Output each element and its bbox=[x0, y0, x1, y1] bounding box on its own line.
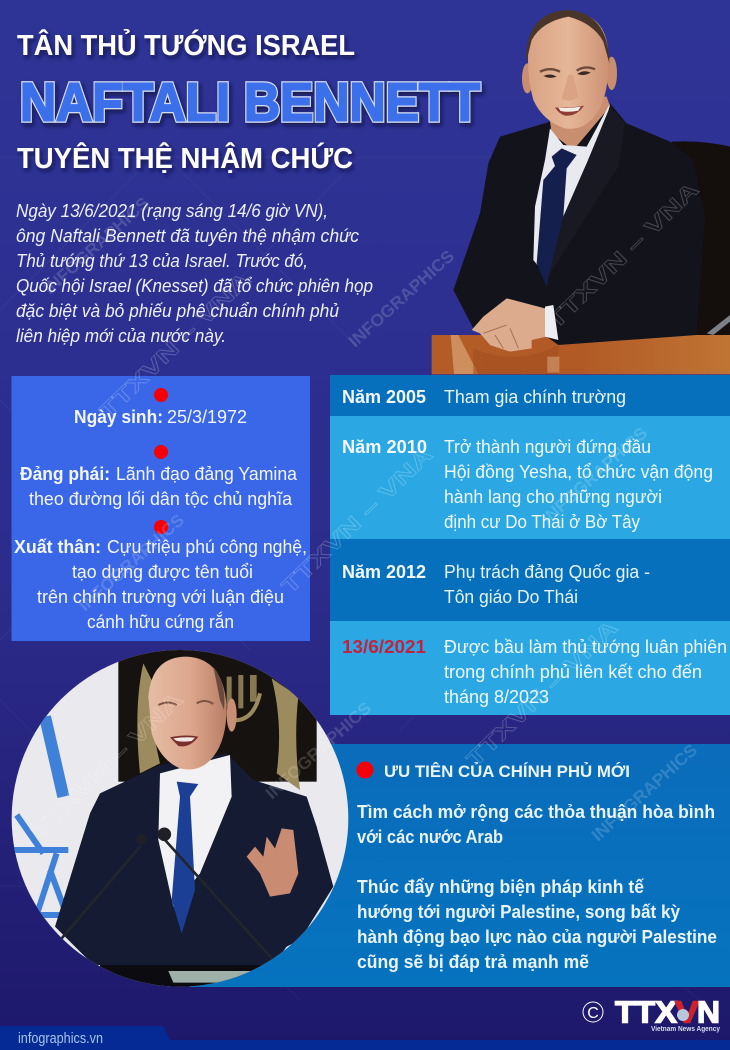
tie bbox=[537, 148, 577, 287]
text: date of birth: 25/3/1972 bbox=[167, 407, 247, 427]
flag bbox=[13, 717, 68, 915]
text: first priority bbox=[357, 802, 715, 847]
head bbox=[528, 12, 609, 129]
row: 13/6/2021: 13/6/2021 bbox=[342, 637, 426, 657]
text: first priority: Tìm cách mở rộng các thỏa thuận hòa bình bbox=[357, 802, 715, 822]
watermark: infographics: INFOGRAPHICS bbox=[75, 511, 188, 615]
intro paragraph: ông Naftali Bennett đã tuyên thệ nhậm chức bbox=[16, 226, 359, 246]
row: 2012 bbox=[330, 539, 730, 621]
globe bbox=[677, 1009, 689, 1021]
cuff bbox=[545, 305, 558, 340]
copyright symbol: C bbox=[587, 1005, 599, 1022]
photo: Bennett speaking at podium bbox=[10, 648, 350, 988]
title line 1: TÂN THỦ TƯỚNG ISRAEL bbox=[17, 28, 355, 62]
dark backdrop bbox=[118, 648, 317, 782]
text: party: Lãnh đạo đảng Yamina bbox=[116, 464, 298, 484]
bullet: party bbox=[154, 445, 168, 459]
row: 2010: định cư Do Thái ở Bờ Tây bbox=[444, 512, 640, 532]
neck bbox=[547, 97, 610, 150]
head bbox=[227, 698, 237, 732]
wordmark: N bbox=[697, 994, 720, 1030]
text: date of birth bbox=[74, 407, 247, 427]
suit bbox=[55, 753, 333, 965]
hands bbox=[472, 298, 547, 352]
row: 13/6/2021 bbox=[330, 621, 730, 715]
mouth bbox=[555, 106, 584, 116]
text: party: theo đường lối dân tộc chủ nghĩa bbox=[29, 489, 293, 509]
bullet: background bbox=[154, 520, 168, 534]
desk bbox=[432, 335, 730, 374]
text: party bbox=[20, 464, 298, 509]
row: 2012: Tôn giáo Do Thái bbox=[444, 587, 578, 607]
bullet: priorities bbox=[356, 762, 374, 778]
row: 2005: Năm 2005 bbox=[342, 387, 426, 407]
row: 2010: Trở thành người đứng đầu bbox=[444, 437, 651, 457]
face details bbox=[158, 701, 213, 705]
watermark: ttxvn: TTXVN – VNA bbox=[27, 688, 187, 844]
intro paragraph: Quốc hội Israel (Knesset) đã tổ chức phiên họp bbox=[16, 276, 373, 296]
text: second priority: Thúc đẩy những biện pháp kinh tế bbox=[357, 877, 645, 897]
wordmark: V bbox=[675, 994, 699, 1030]
watermark: infographics: INFOGRAPHICS bbox=[345, 247, 458, 351]
row: 13/6/2021: tháng 8/2023 bbox=[444, 687, 549, 707]
chair bbox=[672, 141, 730, 335]
ears bbox=[522, 63, 533, 93]
row: 2010: hành lang cho những người bbox=[444, 487, 662, 507]
text: second priority: cũng sẽ bị đáp trả mạnh mẽ bbox=[357, 952, 589, 972]
text: background: trên chính trường với luận điệu bbox=[37, 587, 284, 607]
watermark: infographics: INFOGRAPHICS bbox=[538, 424, 651, 528]
intro paragraph: Ngày 13/6/2021 (rạng sáng 14/6 giờ VN), bbox=[16, 201, 328, 221]
text: first priority: với các nước Arab bbox=[357, 827, 503, 847]
microphones bbox=[62, 828, 273, 960]
text: background: Xuất thân: bbox=[14, 537, 101, 557]
title bbox=[17, 28, 480, 175]
photo: Naftali Bennett at desk bbox=[432, 10, 730, 374]
logo: TTXVN bbox=[583, 994, 720, 1033]
nose bbox=[562, 75, 578, 100]
row: 13/6/2021: Được bầu làm thủ tướng luân phiên bbox=[444, 637, 727, 657]
hair bbox=[526, 10, 609, 63]
watermark: ttxvn: TTXVN – VNA bbox=[95, 268, 255, 424]
tie bbox=[172, 782, 198, 933]
watermark: infographics bbox=[40, 194, 701, 845]
watermark: infographics: INFOGRAPHICS bbox=[40, 194, 153, 298]
text: party: Đảng phái: bbox=[20, 464, 110, 484]
watermark: infographics: INFOGRAPHICS bbox=[588, 741, 701, 845]
text: second priority: hành động bạo lực nào của người Palestine bbox=[357, 927, 717, 947]
watermark: ttxvn bbox=[27, 178, 703, 844]
shirt bbox=[158, 755, 232, 907]
row: 2010 bbox=[330, 416, 730, 539]
intro paragraph bbox=[16, 201, 373, 346]
text: background: Cựu triệu phú công nghệ, bbox=[107, 537, 307, 557]
row: 2005 bbox=[330, 375, 730, 416]
watermark: ttxvn: TTXVN – VNA bbox=[277, 443, 437, 599]
intro paragraph: đặc biệt và bỏ phiếu phê chuẩn chính phủ bbox=[16, 301, 339, 321]
row: 2012: Năm 2012 bbox=[342, 562, 426, 582]
timeline table bbox=[330, 375, 730, 715]
wordmark: TTX bbox=[615, 994, 677, 1030]
text: background: cánh hữu cứng rắn bbox=[87, 611, 234, 632]
panel: government priorities bbox=[190, 744, 730, 987]
watermark: ttxvn: TTXVN – VNA bbox=[462, 616, 622, 772]
title line 3: TUYÊN THỆ NHẬM CHỨC bbox=[17, 141, 353, 175]
row: 13/6/2021: trong chính phủ liên kết cho đến bbox=[444, 662, 702, 682]
suit bbox=[453, 103, 705, 345]
podium bbox=[100, 965, 262, 987]
title line 2: name: NAFTALI BENNETT bbox=[20, 72, 480, 132]
lapel bbox=[547, 107, 625, 283]
shirt bbox=[533, 103, 610, 277]
emblem bbox=[137, 663, 300, 790]
heading: priorities: ƯU TIÊN CỦA CHÍNH PHỦ MỚI bbox=[384, 762, 630, 781]
tagline: Vietnam News Agency bbox=[651, 1026, 720, 1033]
panel: personal details bbox=[12, 376, 310, 641]
hand bbox=[247, 828, 298, 897]
eyes bbox=[543, 71, 591, 78]
watermark: infographics: INFOGRAPHICS bbox=[262, 699, 375, 803]
text: date of birth: Ngày sinh: bbox=[74, 407, 163, 427]
watermark: ttxvn: TTXVN – VNA bbox=[543, 178, 703, 334]
intro paragraph: Thủ tướng thứ 13 của Israel. Trước đó, bbox=[16, 251, 308, 271]
text: second priority: hướng tới người Palestine, song bất kỳ bbox=[357, 902, 680, 922]
footer url: infographics.vn bbox=[18, 1030, 103, 1047]
bullet: date of birth bbox=[154, 388, 168, 402]
watermarks bbox=[27, 178, 703, 845]
row: 2012: Phụ trách đảng Quốc gia - bbox=[444, 562, 650, 582]
row: 2010: Hội đồng Yesha, tổ chức vận động bbox=[444, 462, 713, 482]
brows bbox=[540, 67, 595, 72]
wordmark bbox=[615, 994, 720, 1030]
text: background: tạo dựng được tên tuổi bbox=[72, 562, 253, 582]
title line 2: name: NAFTALI BENNETT bbox=[20, 72, 480, 132]
row: 2005: Tham gia chính trường bbox=[444, 387, 626, 407]
text: second priority bbox=[357, 877, 717, 972]
footer bar bbox=[0, 1026, 730, 1050]
row: 2010: Năm 2010 bbox=[342, 437, 427, 457]
intro paragraph: liên hiệp mới của nước này. bbox=[16, 326, 226, 346]
text: background bbox=[14, 537, 307, 632]
